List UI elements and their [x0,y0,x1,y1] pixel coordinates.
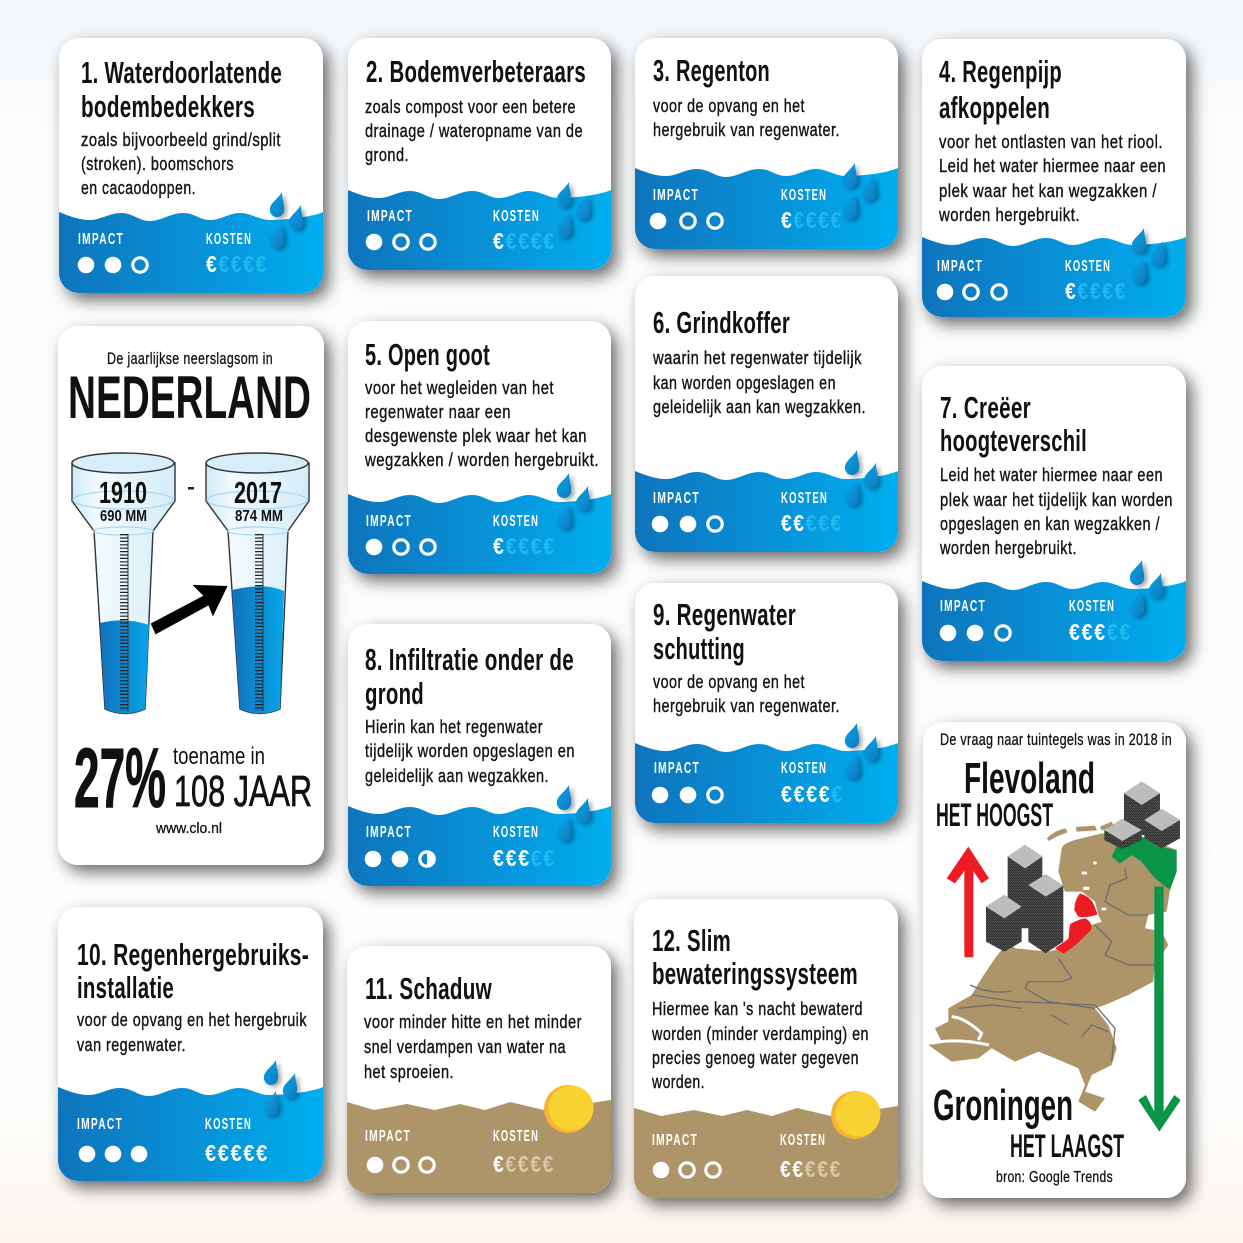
impact rating [650,187,722,229]
cost rating [493,513,556,559]
description: geleidelijk aan wegzakken. [365,765,549,786]
heading: bewateringssysteem [652,956,858,991]
cost rating: KOSTEN [206,231,252,248]
icon: water drops [1130,560,1163,616]
cost rating [493,1128,555,1177]
description [364,1011,582,1082]
heading: 12. Slim [652,923,731,958]
impact rating [365,824,435,867]
gauge label: 1910 [99,475,147,510]
cost rating: KOSTEN [493,513,539,530]
description [651,998,869,1092]
heading: installatie [77,970,174,1005]
heading: 8. Infiltratie onder de [365,642,574,677]
impact rating: IMPACT [78,231,124,248]
wave panel [635,743,898,823]
gauge label [99,475,147,525]
heading: grond [365,676,424,711]
description [365,96,583,165]
cost rating: KOSTEN [493,208,540,225]
impact rating: IMPACT [367,208,413,225]
heading: schutting [653,631,745,666]
description [653,95,840,140]
heading: Groningen: Groningen [933,1081,1073,1130]
heading: Flevoland: Flevoland [964,754,1095,803]
heading: 9. Regenwater [653,597,796,632]
panel: tuintegels map [923,722,1186,1198]
impact rating: IMPACT [77,1116,123,1133]
description [652,347,866,417]
description: geleidelijk aan kan wegzakken. [653,396,866,417]
icon: water drops [264,1060,297,1116]
description [939,464,1173,558]
impact rating: IMPACT [365,1128,411,1145]
description: precies genoeg water gegeven [652,1047,859,1068]
cost rating: €€€€€ [780,1156,842,1182]
impact rating [365,1128,434,1173]
impact rating: IMPACT [653,490,700,507]
description: het sproeien. [364,1061,454,1082]
description: zoals compost voor een betere [365,96,576,117]
heading: afkoppelen [939,90,1050,125]
icon: water drops [557,182,590,238]
impact rating [652,760,722,803]
wave panel [635,471,898,552]
description: grond. [365,144,409,165]
wave panel [59,212,323,293]
card 3: regenton [635,38,898,249]
impact rating [366,513,435,555]
description: voor het wegleiden van het [365,377,554,398]
description: regenwater naar een [365,401,511,422]
wave panel [348,494,611,574]
cost rating: €€€€€ [205,1140,269,1166]
wave panel [635,168,898,249]
source: bron: Google Trends [996,1169,1113,1186]
description: opgeslagen en kan wegzakken / [940,513,1160,534]
description: plek waar het kan wegzakken / [939,180,1157,201]
heading [81,55,282,124]
heading [365,642,574,711]
icon: sun [544,1085,594,1133]
rain gauge 1910 [72,453,175,714]
heading [939,54,1062,125]
impact rating: IMPACT [652,1132,698,1149]
label: het hoogst: HET HOOGST [936,797,1053,833]
cost rating: KOSTEN [1069,598,1115,615]
cost rating: KOSTEN [781,760,827,777]
cost rating [780,1132,842,1182]
cost rating [1065,258,1127,304]
intro text: De jaarlijkse neerslagsom in [107,350,273,368]
heading: 5. Open goot [365,337,490,372]
cost rating: €€€€€ [1065,278,1127,304]
cost rating [1069,598,1132,645]
card 9: regenwater schutting [635,583,898,823]
cost rating [493,208,556,254]
icon: water drops [557,785,590,841]
cost rating: €€€€€ [493,228,556,254]
impact rating: IMPACT [366,824,412,841]
description [364,377,599,470]
map of the Netherlands [928,782,1181,1132]
wave panel [348,806,611,886]
icon: tile stacks Groningen [1104,782,1180,849]
heading: bodembedekkers [81,89,255,124]
gauge label: 690 MM [100,508,147,525]
impact rating: IMPACT [653,187,699,204]
province: Groningen (lowest) [1112,837,1177,890]
wave panel [58,1087,323,1181]
impact rating [652,490,722,532]
arrow: green down [1138,887,1181,1132]
description: snel verdampen van water na [364,1036,566,1057]
cost rating: €€€€€ [1069,619,1132,645]
cost rating [781,187,843,233]
card 2: bodemverbeteraars [348,38,611,270]
impact rating: IMPACT [937,258,983,275]
cost rating: KOSTEN [781,187,827,204]
heading: 10. Regenhergebruiks- [77,937,309,972]
wave panel [922,581,1186,661]
description: plek waar het tijdelijk kan worden [940,489,1173,510]
description: van regenwater. [77,1034,186,1055]
description [938,131,1166,225]
impact rating: IMPACT [366,513,412,530]
description: Hiermee kan 's nacht bewaterd [652,998,863,1019]
description: Leid het water hiermee naar een [940,464,1163,485]
card 6: grindkoffer [635,276,898,552]
impact rating [77,1116,147,1162]
stat label: 108 JAAR [174,767,312,816]
icon: sun [831,1091,880,1139]
cost rating: KOSTEN [205,1116,252,1133]
label: het laagst: HET LAAGST [1010,1128,1124,1164]
card 5: open goot [348,321,611,574]
gauge label [234,475,283,525]
description [81,129,281,198]
description: worden hergebruikt. [939,537,1077,558]
icon: water drops [270,192,303,248]
heading: 2. Bodemverbeteraars [366,54,586,89]
stat label: toename in [173,743,265,770]
cost rating: KOSTEN [1065,258,1111,275]
cost rating: KOSTEN [493,1128,539,1145]
icon: water drops [557,473,590,529]
description: voor het ontlasten van het riool. [939,131,1163,152]
cost rating [781,760,844,807]
cost rating [205,1116,269,1166]
cost rating: €€€€€ [781,510,843,536]
cost rating [206,231,268,277]
description: kan worden opgeslagen en [653,372,836,393]
cost rating: KOSTEN [781,490,828,507]
heading: 1. Waterdoorlatende [81,55,282,90]
heading: hoogteverschil [940,423,1087,458]
stat: 27%: 27% [74,731,166,825]
impact rating: IMPACT [654,760,700,777]
description: Leid het water hiermee naar een [939,155,1166,176]
impact rating [940,598,1010,641]
cost rating [493,824,556,871]
card 10: regenhergebruiksinstallatie [58,907,323,1181]
heading [77,937,309,1005]
cost rating: €€€€€ [206,251,268,277]
description: hergebruik van regenwater. [653,119,840,140]
description: desgewenste plek waar het kan [365,425,587,446]
source: www.clo.nl [155,820,222,837]
icon: water drops [843,163,876,219]
heading: 4. Regenpijp [939,54,1062,89]
description: voor de opvang en het [653,95,805,116]
heading: 3. Regenton [653,53,770,88]
cost rating: €€€€€ [781,781,844,807]
impact rating [652,1132,720,1178]
cost rating: €€€€€ [493,845,556,871]
description: worden. [651,1071,705,1092]
cost rating: €€€€€ [781,207,843,233]
icon: water drops [845,450,878,506]
heading [940,390,1087,458]
wave panel [348,190,611,270]
cost rating [781,490,843,536]
impact rating: IMPACT [940,598,986,615]
description: wegzakken / worden hergebruikt. [364,449,599,470]
description [365,716,575,786]
impact rating [366,208,435,250]
description: (stroken). boomschors [81,153,234,174]
description [653,671,840,716]
card 4: regenpijp afkoppelen [922,39,1186,317]
description: drainage / wateropname van de [365,120,583,141]
heading: 11. Schaduw [365,971,492,1006]
province: Flevoland (highest) [1055,893,1098,954]
cost rating: KOSTEN [780,1132,826,1149]
arrow: increase [152,586,226,633]
description: worden hergebruikt. [938,204,1080,225]
description: zoals bijvoorbeeld grind/split [81,129,281,150]
heading: 7. Creëer [940,390,1031,425]
description: voor de opvang en het hergebruik [77,1009,307,1030]
heading [652,923,858,991]
panel: neerslag Nederland [58,326,324,865]
description: waarin het regenwater tijdelijk [652,347,862,368]
cost rating: KOSTEN [493,824,539,841]
cost rating: €€€€€ [493,1151,555,1177]
icon: water drops [845,723,878,779]
gauge label: 2017 [234,475,282,510]
card 12: slim bewateringssysteem [634,899,898,1198]
description: Hierin kan het regenwater [365,716,543,737]
description [77,1009,307,1055]
description: en cacaodoppen. [81,177,196,198]
description: tijdelijk worden opgeslagen en [365,740,575,761]
card 11: schaduw [347,946,611,1193]
card 7: creeer hoogteverschil [922,366,1186,661]
card 1: waterdoorlatende bodembedekkers [59,38,323,293]
wave panel [922,237,1186,317]
heading: Nederland: NEDERLAND [68,364,311,431]
ground panel [634,1106,898,1198]
dash between gauges [188,487,194,490]
gauge label: 874 MM [235,508,283,525]
stat label [173,743,312,816]
description: worden (minder verdamping) en [651,1023,869,1044]
card 8: infiltratie onder de grond [348,624,611,886]
cost rating: €€€€€ [493,533,556,559]
icon: water drops [1132,228,1165,284]
icon: tile stacks Flevoland [986,845,1063,953]
heading [653,597,796,666]
ground panel [347,1100,611,1193]
arrow: red up [947,847,989,957]
impact rating [78,231,147,273]
impact rating [937,258,1006,300]
description: voor de opvang en het [653,671,805,692]
description: hergebruik van regenwater. [653,695,840,716]
rain gauge 2017 [206,453,309,714]
heading: 6. Grindkoffer [653,305,790,340]
description: voor minder hitte en het minder [364,1011,582,1032]
